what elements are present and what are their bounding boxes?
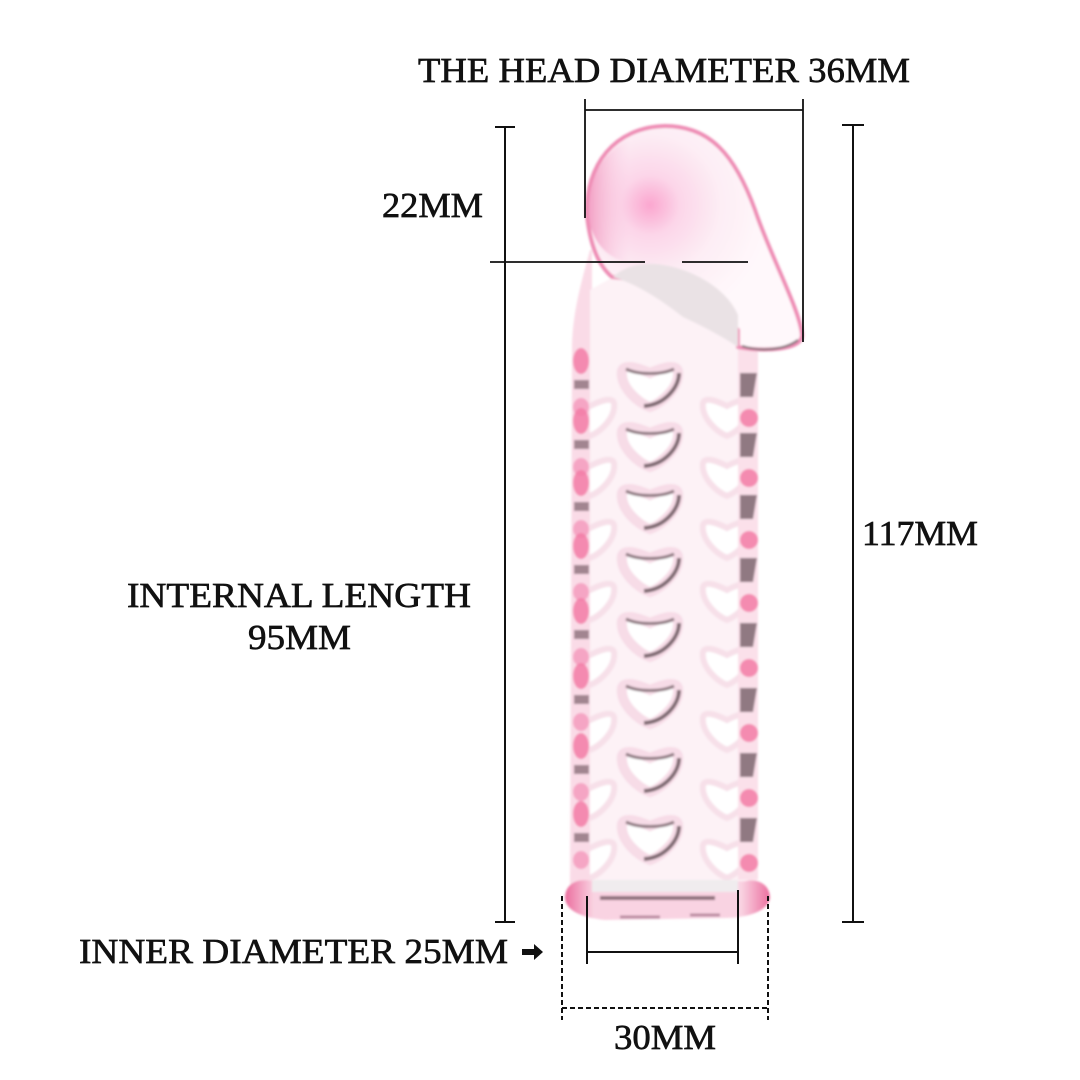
label: 22mm: 22MM (382, 186, 483, 225)
product: head underside shading (613, 264, 738, 347)
product: head left shading (588, 135, 640, 262)
product: head lower lobe rim (742, 340, 798, 349)
product: right ribbed strip (738, 345, 758, 880)
label: 95mm: 95MM (248, 618, 351, 657)
label: head diameter: THE HEAD DIAMETER 36MM (418, 51, 910, 90)
dimension: head diameter (585, 99, 803, 342)
label: 117mm: 117MM (862, 514, 978, 553)
label: internal length: INTERNAL LENGTH (127, 576, 471, 615)
product illustration (565, 126, 802, 920)
product: heart pattern centre column (622, 367, 679, 860)
product: heart pattern left edge (590, 397, 617, 880)
arrow: inner diameter pointer (522, 944, 543, 960)
dimension: 22mm head line (490, 261, 748, 263)
product: heart pattern side column (700, 397, 738, 880)
dimension: internal length bracket (495, 127, 515, 922)
dimension: inner diameter bracket (587, 890, 738, 964)
dimension: total length bracket (842, 125, 864, 922)
product: left ribbed strip (570, 250, 592, 885)
product: head (587, 126, 802, 349)
label: 30mm: 30MM (614, 1018, 716, 1057)
dimension: outer diameter dashed box (562, 896, 768, 1020)
product: base flange (565, 880, 770, 920)
label: inner diameter: INNER DIAMETER 25MM (79, 932, 508, 971)
product: sleeve front panel (590, 277, 738, 880)
